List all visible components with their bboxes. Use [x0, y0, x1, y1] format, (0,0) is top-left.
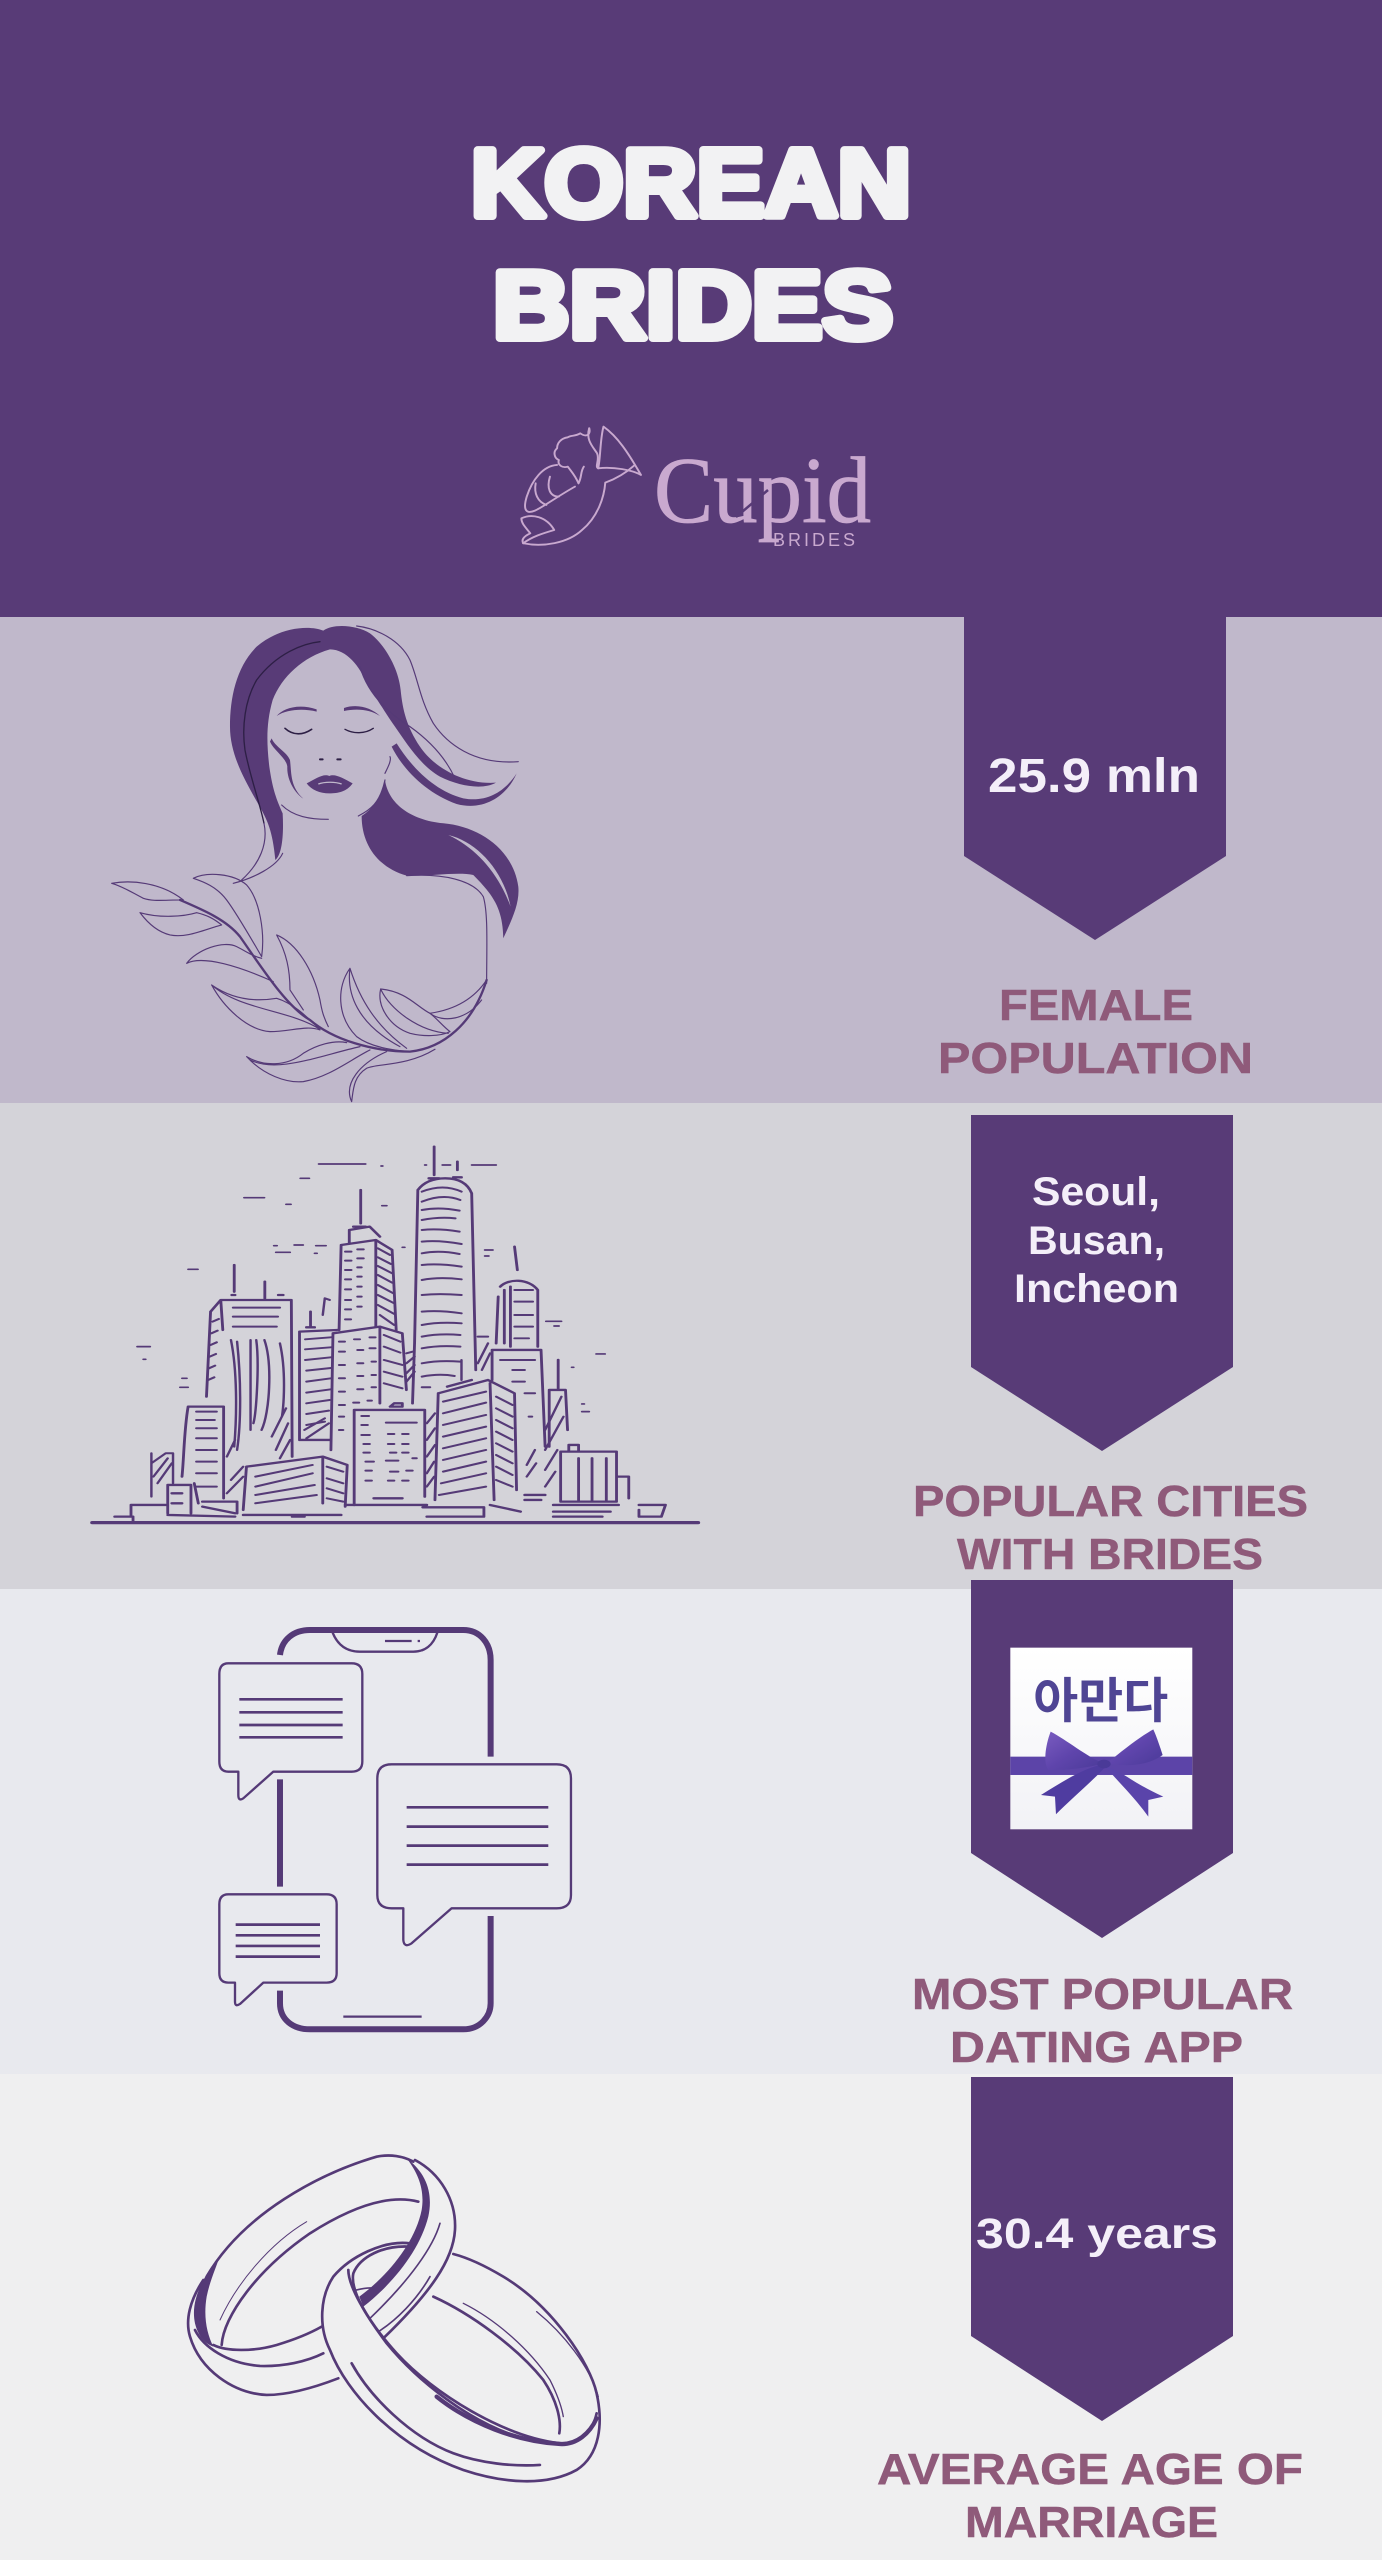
label: popular cities [913, 1477, 1308, 1579]
cities list: Incheon [1014, 1267, 1179, 1311]
chat bubble: top left [219, 1663, 362, 1799]
panel: dating app [0, 1580, 1382, 2074]
label: female population: POPULATION [938, 1034, 1253, 1083]
title: BRIDES [493, 252, 893, 359]
hair [230, 626, 519, 938]
label: female population [938, 981, 1253, 1083]
icon: cherub outline [521, 427, 641, 545]
icon: Amanda app logo: 아만다 [1033, 1675, 1168, 1729]
value: 30.4 years [976, 2210, 1218, 2258]
title [471, 130, 911, 359]
sky marks [137, 1162, 605, 1412]
label: dating app: MOST POPULAR [912, 1970, 1293, 2019]
banner: 25.9 mln [964, 617, 1226, 940]
label: age of marriage: MARRIAGE [965, 2498, 1218, 2547]
label: age of marriage [877, 2445, 1303, 2547]
illustration: city skyline [92, 1147, 698, 1523]
panel: age of marriage [0, 2074, 1382, 2560]
banner: 30.4 years [971, 2077, 1233, 2421]
label: dating app: DATING APP [950, 2023, 1243, 2072]
panel: popular cities [0, 1103, 1382, 1589]
banner: cities [971, 1115, 1233, 1451]
label: age of marriage: AVERAGE AGE OF [877, 2445, 1303, 2494]
label: female population: FEMALE [999, 981, 1193, 1030]
cities list [1014, 1170, 1179, 1311]
skyscrapers [413, 1147, 476, 1403]
illustration: woman with leaves [112, 626, 519, 1102]
logo: Cupid Brides [521, 427, 871, 550]
label: popular cities: WITH BRIDES [957, 1530, 1263, 1579]
hair highlight [448, 835, 511, 907]
cities list: Seoul, [1032, 1170, 1160, 1214]
ring: upper left [188, 2155, 455, 2395]
banner: dating app [971, 1580, 1233, 1938]
logo subtitle: BRIDES [773, 530, 855, 550]
label: dating app [912, 1970, 1293, 2072]
illustration: wedding rings [188, 2155, 600, 2481]
icon: Amanda app logo [1010, 1648, 1192, 1829]
face details [244, 642, 373, 823]
chat bubble: right [377, 1764, 571, 1945]
label: popular cities: POPULAR CITIES [913, 1477, 1308, 1526]
ground line [92, 1518, 698, 1528]
chat bubble: bottom left [219, 1894, 337, 2005]
ring: lower right [322, 2243, 600, 2481]
thin outlines and leaves [112, 626, 518, 1102]
logo wordmark: Cupid [654, 439, 871, 543]
cities list: Busan, [1028, 1219, 1165, 1263]
branch [180, 900, 487, 1052]
title: KOREAN [471, 130, 911, 237]
value: 25.9 mln [988, 750, 1200, 803]
panel: female population [0, 617, 1382, 1103]
panel: header [0, 0, 1382, 617]
phone [280, 1630, 491, 2029]
illustration: phone and chat bubbles [219, 1630, 571, 2029]
